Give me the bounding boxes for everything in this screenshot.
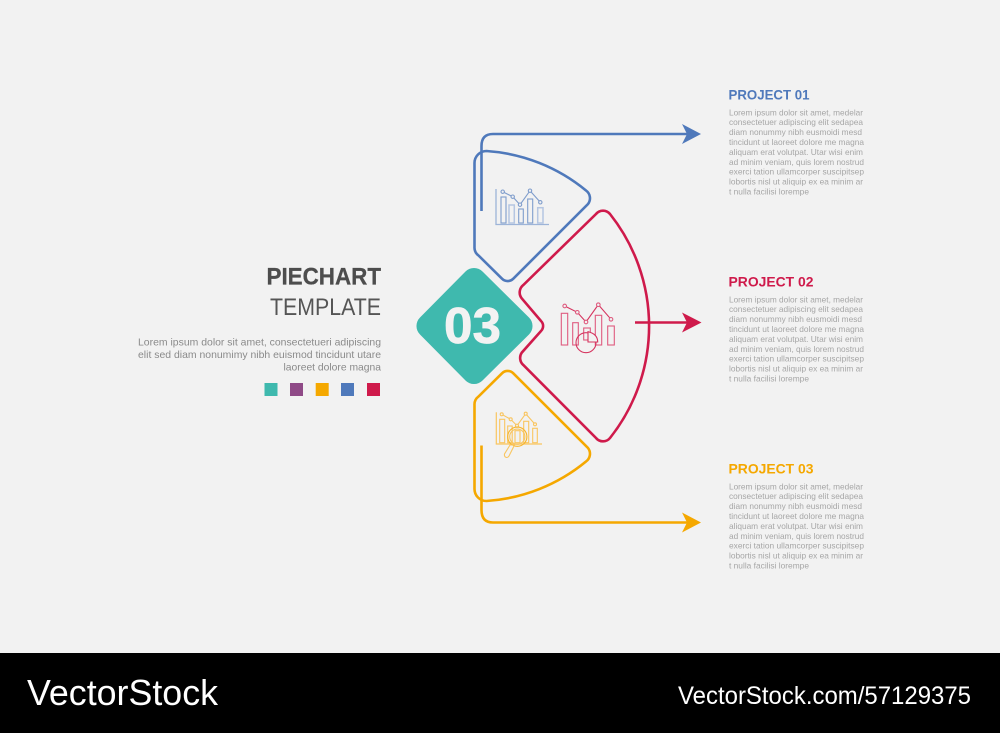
text block: project 02 <box>728 274 864 384</box>
project 03 body: t nulla facilisi lorempe <box>729 560 809 570</box>
segment: blue <box>474 151 590 281</box>
colour swatches <box>264 383 380 396</box>
project 01 body: tincidunt ut laoreet dolore me magna <box>729 137 864 147</box>
arrow: red <box>635 312 702 332</box>
intro text: Lorem ipsum dolor sit amet, consectetueri adipiscing <box>138 336 381 348</box>
project 01 body: t nulla facilisi lorempe <box>729 186 809 196</box>
project 02 body: tincidunt ut laoreet dolore me magna <box>729 324 864 334</box>
project 01 body: ad minim veniam, quis lorem nostrud <box>729 157 864 167</box>
arrow: yellow <box>482 446 701 532</box>
icon: red chart with pie <box>561 303 614 353</box>
project 03 body: exerci tation ullamcorper suscipitsep <box>729 541 864 551</box>
project 03 heading: PROJECT 03 <box>728 460 814 476</box>
title block <box>138 264 381 396</box>
project 03 body <box>729 481 864 570</box>
project 01 body: exerci tation ullamcorper suscipitsep <box>729 167 864 177</box>
project 02 body: diam nonummy nibh eusmoidi mesd <box>729 314 862 324</box>
project 01 body: consectetuer adipiscing elit sedapea <box>729 117 863 127</box>
project 03 body: ad minim veniam, quis lorem nostrud <box>729 531 864 541</box>
heading: template: TEMPLATE <box>270 294 381 321</box>
project 02 body: exerci tation ullamcorper suscipitsep <box>729 354 864 364</box>
project 03 body: diam nonummy nibh eusmoidi mesd <box>729 501 862 511</box>
project 02 body: consectetuer adipiscing elit sedapea <box>729 304 863 314</box>
footer url text: VectorStock.com/57129375 <box>678 682 971 710</box>
intro text <box>138 336 381 374</box>
icon: yellow chart with magnifier <box>496 412 542 458</box>
project 03 body: consectetuer adipiscing elit sedapea <box>729 491 863 501</box>
project 01 heading: PROJECT 01 <box>728 86 810 102</box>
text block: project 01 <box>728 86 864 196</box>
project 01 body: diam nonummy nibh eusmoidi mesd <box>729 127 862 137</box>
watermark footer bar <box>0 653 1000 733</box>
project 02 body: aliquam erat volutpat. Utar wisi enim <box>729 334 863 344</box>
project 02 body: ad minim veniam, quis lorem nostrud <box>729 344 864 354</box>
project 03 body: lobortis nisl ut aliquip ex ea minim ar <box>729 551 863 561</box>
project 02 heading: PROJECT 02 <box>728 274 814 290</box>
arrow: blue <box>482 124 701 211</box>
project 02 body: lobortis nisl ut aliquip ex ea minim ar <box>729 364 863 374</box>
project 01 body: lobortis nisl ut aliquip ex ea minim ar <box>729 177 863 187</box>
project 01 body: Lorem ipsum dolor sit amet, medelar <box>729 107 863 117</box>
text block: project 03 <box>728 460 864 570</box>
project 02 body: Lorem ipsum dolor sit amet, medelar <box>729 294 863 304</box>
intro text: elit sed diam nonumimy nibh euismod tincidunt utare <box>138 349 381 361</box>
project 03 body: aliquam erat volutpat. Utar wisi enim <box>729 521 863 531</box>
heading: piechart: PIECHART <box>266 264 381 290</box>
project 02 body: t nulla facilisi lorempe <box>729 374 809 384</box>
segment: red <box>520 211 649 441</box>
project 02 body <box>729 294 864 384</box>
project 01 body: aliquam erat volutpat. Utar wisi enim <box>729 147 863 157</box>
centre diamond with number <box>416 268 533 384</box>
centre diamond with number: 03 <box>444 297 501 354</box>
project 01 body <box>729 107 864 196</box>
project 03 body: Lorem ipsum dolor sit amet, medelar <box>729 481 863 491</box>
project 03 body: tincidunt ut laoreet dolore me magna <box>729 511 864 521</box>
intro text: laoreet dolore magna <box>284 362 381 374</box>
icon: blue bar chart <box>496 189 549 224</box>
footer logo text: VectorStock <box>27 672 219 713</box>
segment: yellow <box>474 371 590 501</box>
